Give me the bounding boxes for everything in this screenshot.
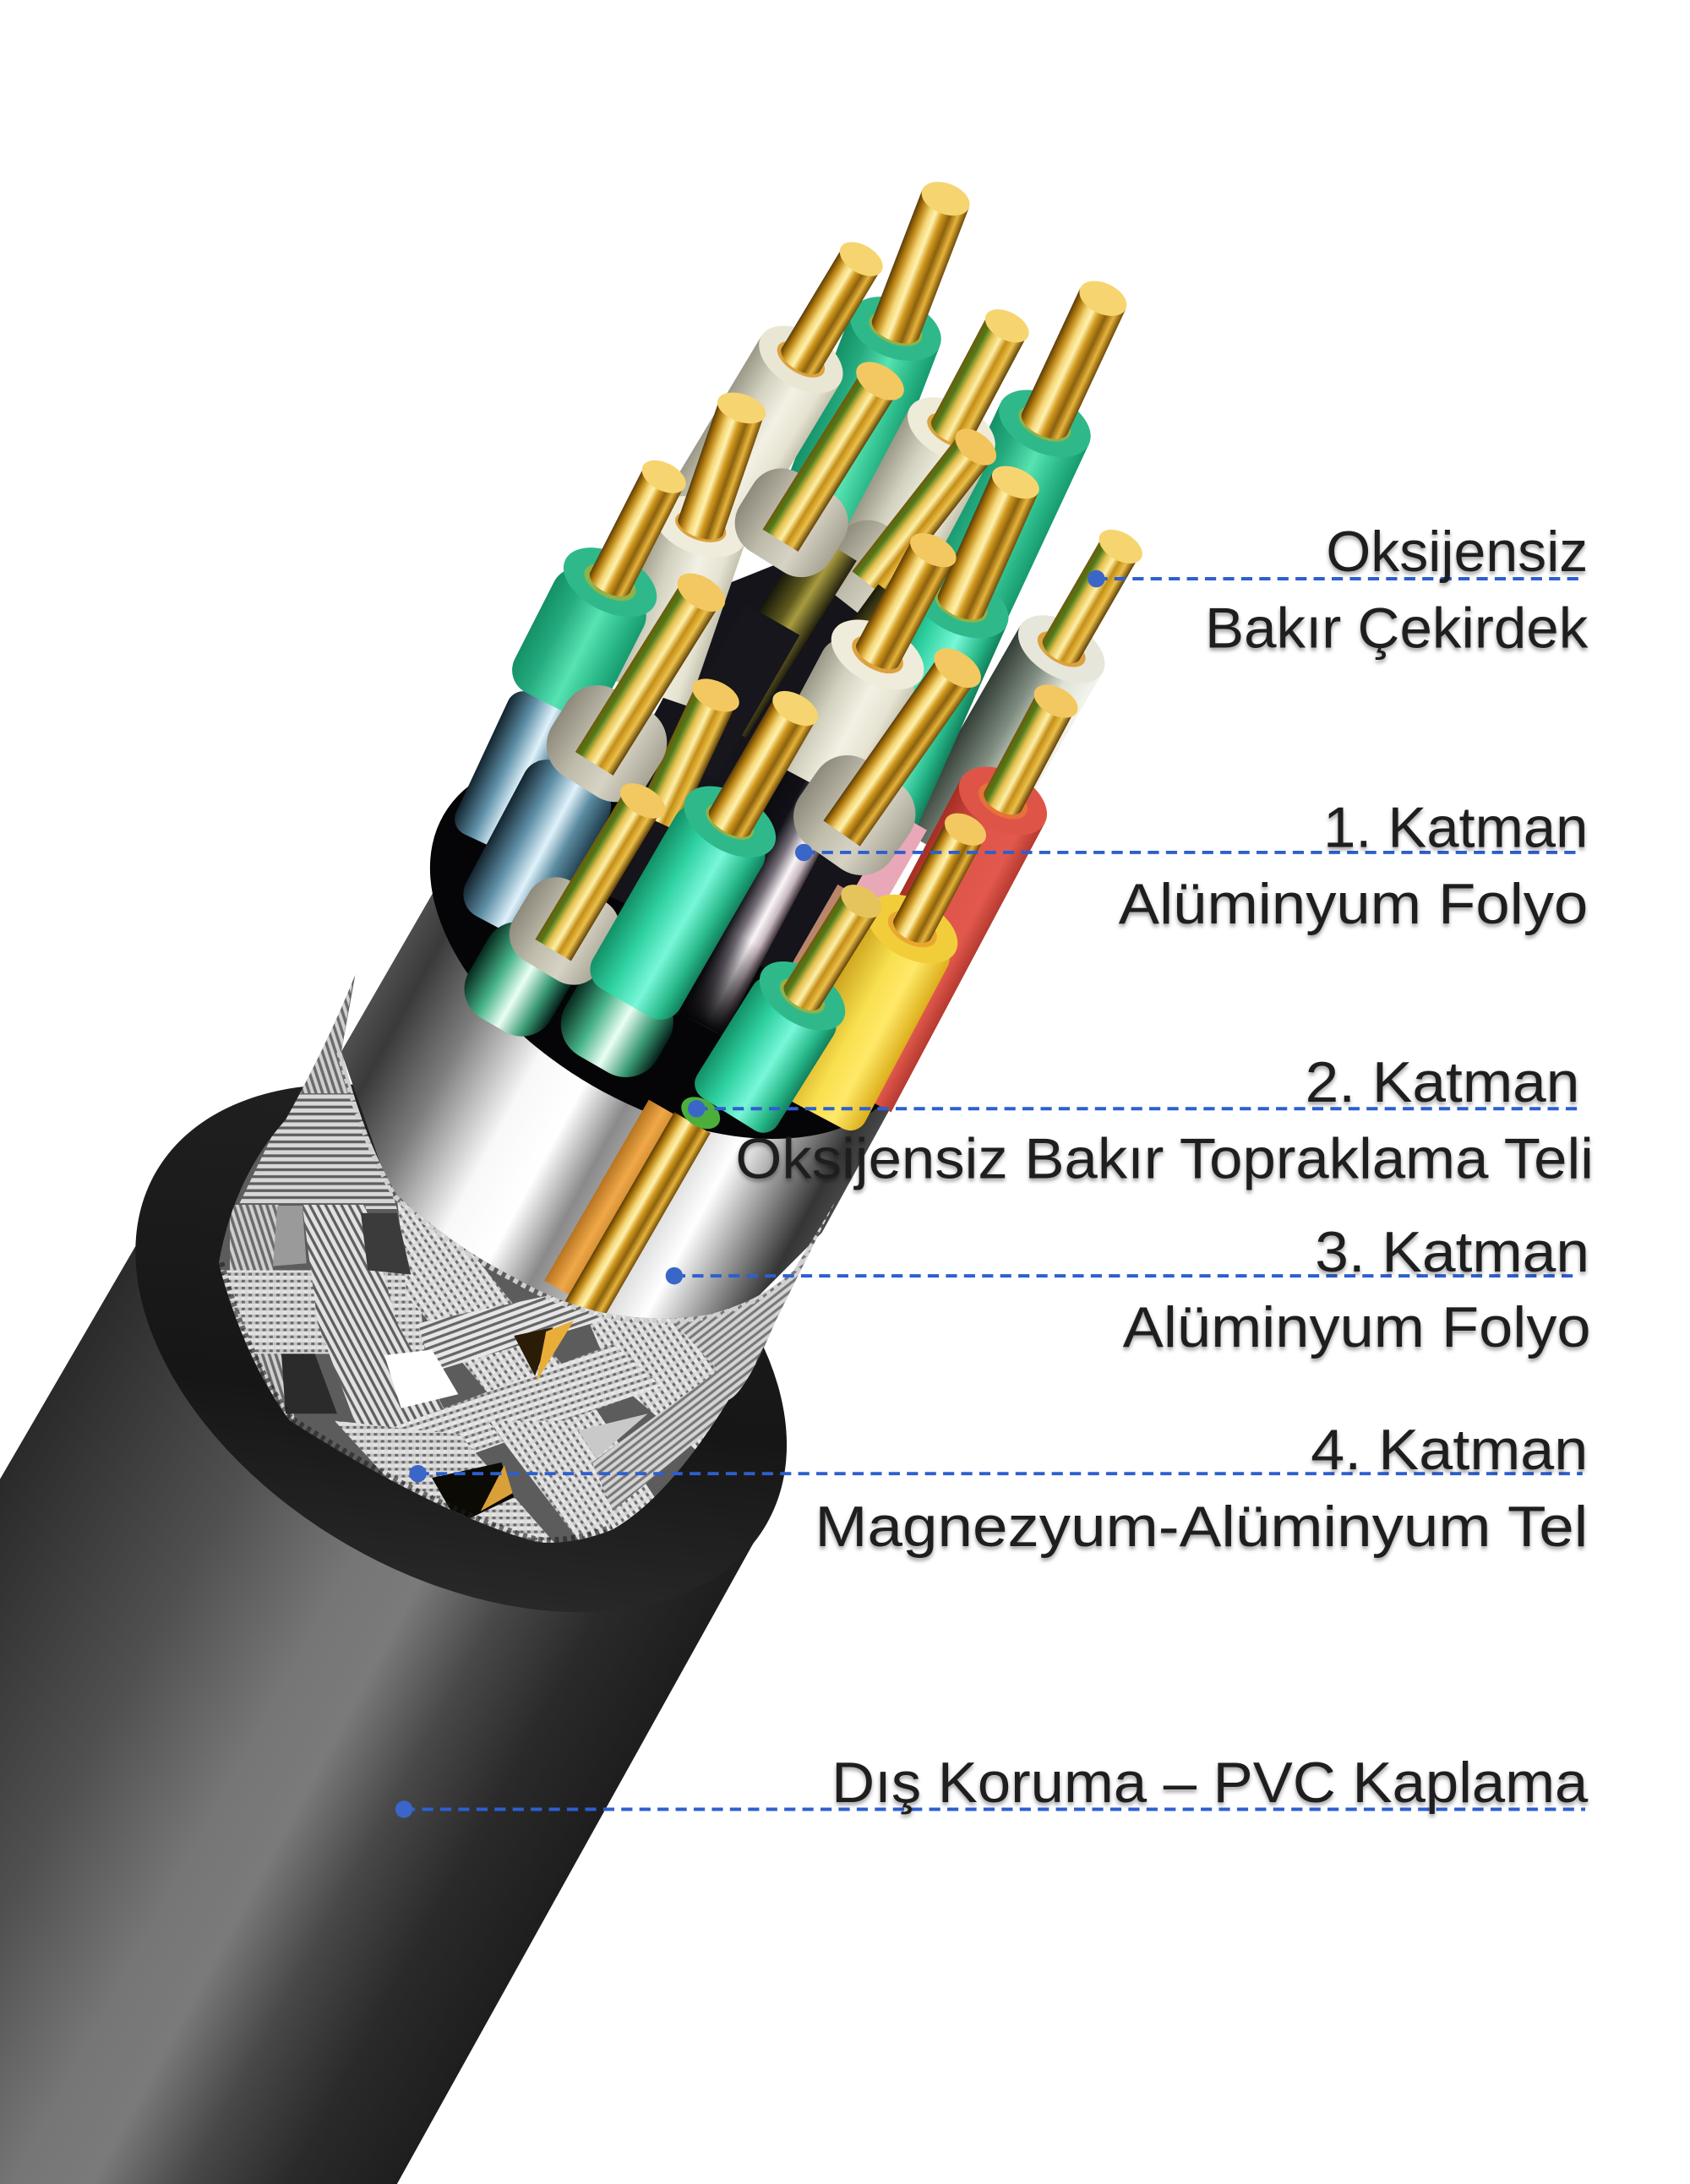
label: Oksijensiz Bakır Çekirdek: Oksijensiz	[1326, 520, 1588, 584]
wire: blue silver front	[455, 751, 620, 949]
wire: right green	[899, 264, 1153, 662]
wire: pink and copper shielding strips	[768, 814, 927, 1019]
ground wire tip	[676, 1091, 726, 1136]
wire: bottom silver green right	[548, 956, 687, 1091]
wire: back green	[766, 167, 995, 567]
olive core wires	[663, 531, 919, 805]
wire: red	[808, 667, 1104, 1112]
gold ground wire	[517, 1100, 711, 1404]
label: 1. Katman Alüminyum Folyo	[795, 796, 1588, 936]
wire: left white	[599, 379, 791, 706]
label: 4. Katman Magnezyum-Alüminyum Tel: Magnezyum-Alüminyum Tel	[815, 1495, 1588, 1559]
braid top spike	[296, 980, 356, 1100]
wire: lower translucent	[498, 763, 693, 996]
label: 2. Katman Oksijensiz Bakır Topraklama Teli: 2. Katman	[1306, 1051, 1579, 1114]
wire: middle white	[821, 291, 1055, 618]
outer PVC jacket	[0, 976, 880, 2184]
wire: left green	[504, 442, 715, 727]
braid openings	[384, 1349, 458, 1408]
braided magnesium-aluminium wire	[219, 975, 835, 1543]
wire: bottom silver green left	[452, 910, 587, 1048]
label: 1. Katman Alüminyum Folyo: Alüminyum Folyo	[1119, 873, 1588, 936]
wire: yellow	[771, 794, 1015, 1136]
label: Dış Koruma PVC Kaplama	[395, 1751, 1589, 1818]
label: 3. Katman Alüminyum Folyo: Alüminyum Folyo	[1123, 1296, 1591, 1359]
black opening of the foil	[363, 676, 982, 1218]
wire: far right grey	[902, 511, 1169, 878]
wire bundle	[450, 167, 1169, 1139]
wire: left translucent	[533, 550, 756, 815]
label: 1. Katman Alüminyum Folyo: 1. Katman	[1323, 796, 1588, 859]
dark core between wires	[599, 529, 975, 975]
label: 3. Katman Alüminyum Folyo	[666, 1221, 1591, 1359]
label: Dış Koruma PVC Kaplama: Dış Koruma – PVC Kaplama	[831, 1751, 1589, 1815]
wire: black foil with reflection	[639, 758, 847, 1036]
wire: top translucent	[722, 340, 933, 590]
wire: short gold behind big green	[634, 672, 744, 832]
braid bands diagonal	[397, 1198, 668, 1549]
wire: back translucent right	[809, 403, 1026, 640]
wire: mid right green	[822, 449, 1067, 835]
label: 2. Katman Oksijensiz Bakır Topraklama Teli: Oksijensiz Bakır Topraklama Teli	[735, 1128, 1594, 1191]
label: 3. Katman Alüminyum Folyo: 3. Katman	[1315, 1221, 1589, 1284]
wire: big green	[582, 672, 846, 1028]
label: Oksijensiz Bakır Çekirdek: Bakır Çekirdek	[1205, 597, 1589, 661]
label: Oksijensiz Bakır Çekirdek	[1088, 520, 1589, 661]
wire: right translucent	[779, 624, 1012, 890]
wire: mid white	[749, 515, 984, 838]
silver aluminium foil layer	[341, 870, 919, 1330]
wire: blue silver rear	[450, 686, 591, 863]
wire: back white	[668, 224, 908, 538]
label: 4. Katman Magnezyum-Alüminyum Tel: 4. Katman	[1311, 1419, 1588, 1482]
wire: lower right green	[689, 864, 909, 1139]
label: 2. Katman Oksijensiz Bakır Topraklama Teli	[688, 1051, 1594, 1191]
braid bands left horizontal	[237, 1093, 397, 1209]
label: 4. Katman Magnezyum-Alüminyum Tel	[409, 1419, 1588, 1559]
